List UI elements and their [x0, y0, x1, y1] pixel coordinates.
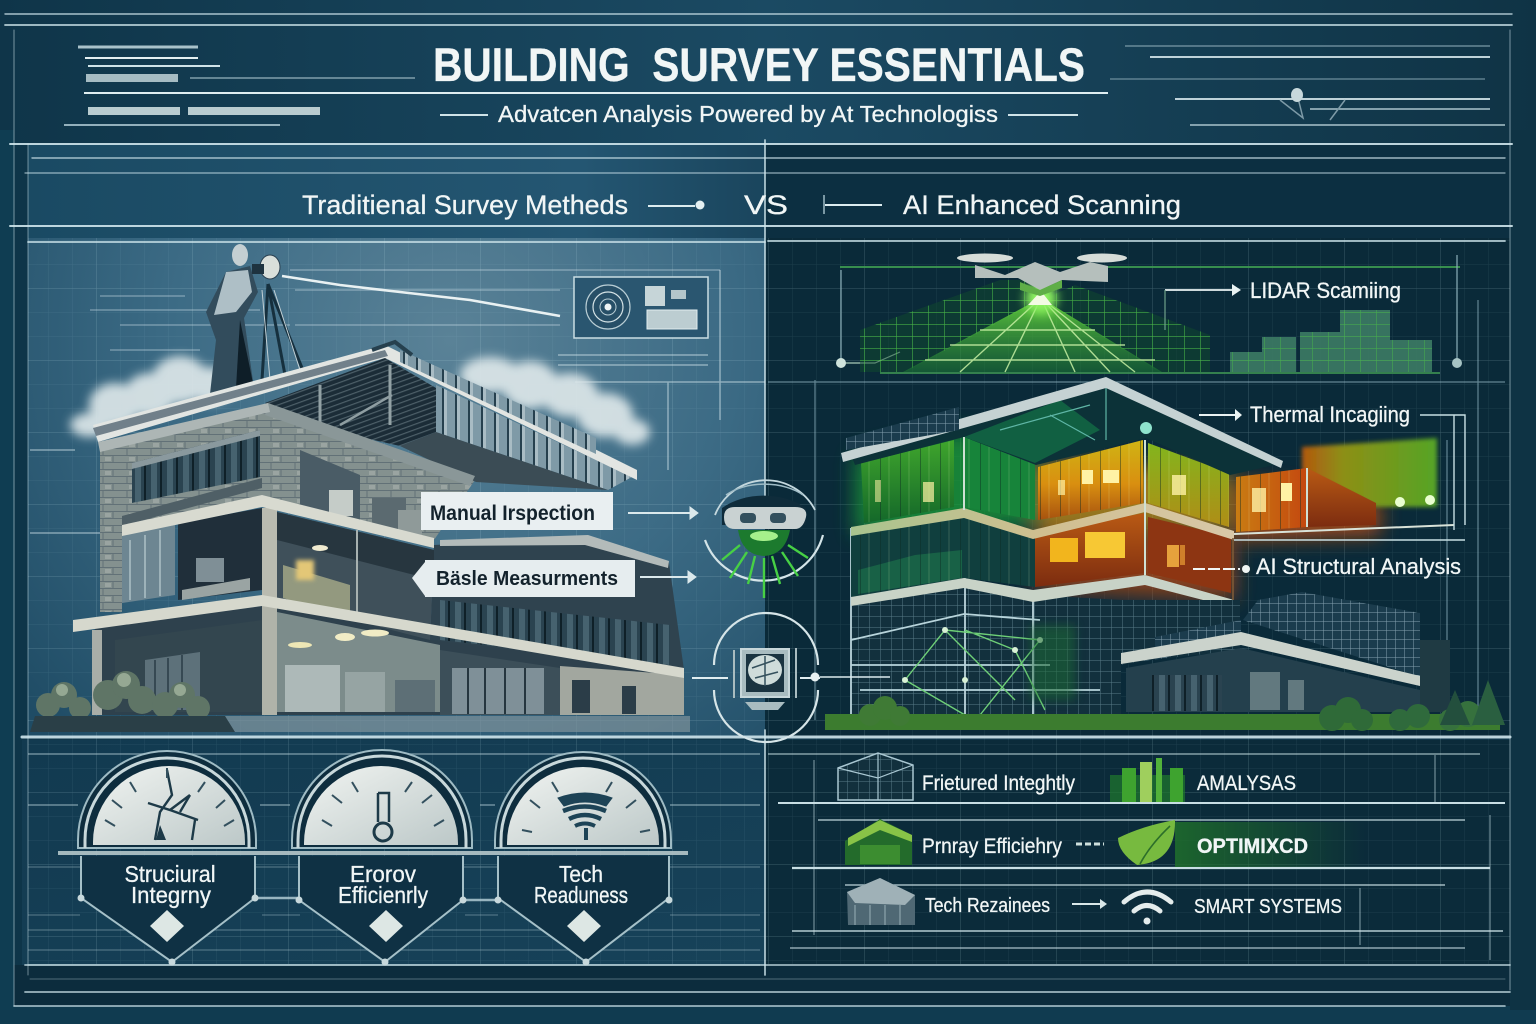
wifi glyph [1124, 892, 1171, 924]
row: structural integrity [838, 753, 1296, 802]
gauge: energy efficiency: Erorov [350, 861, 416, 887]
arrow: measurements to scan icon [640, 571, 696, 583]
thermometer glyph [378, 793, 389, 822]
gauge: tech readiness [494, 752, 672, 966]
roof soffit [265, 358, 632, 490]
row: energy efficiency: Prnray Efficiehry [922, 835, 1062, 858]
gauge: energy efficiency: Efficienrly [338, 882, 428, 908]
center icon: headset scanner [705, 480, 823, 598]
shield [299, 856, 463, 962]
lower wireframe structure [851, 510, 1121, 715]
roof glass [850, 380, 1283, 475]
row: tech readiness [847, 878, 1342, 925]
panel: comparison rows [768, 753, 1505, 960]
blueprint guides [768, 300, 1505, 720]
header decoration: right blueprint lines and survey mark [1110, 46, 1505, 125]
shrubs [30, 671, 235, 732]
gauge band lines [28, 754, 760, 965]
heading: AI enhanced scanning: AI Enhanced Scanning [903, 190, 1181, 220]
ground floor [92, 605, 690, 732]
arrow: manual inspection to scan icon [628, 507, 698, 519]
first slab [122, 495, 434, 548]
surveyor on roof [206, 244, 302, 394]
AI building [841, 377, 1465, 715]
middle floor [100, 447, 684, 670]
roof rail [846, 407, 959, 450]
label: LIDAR scanning: LIDAR Scamiing [1250, 278, 1401, 303]
leaf glyph [1118, 820, 1175, 865]
row lines [768, 754, 1505, 960]
LIDAR city point cloud [1230, 310, 1432, 372]
callout: manual inspection [421, 492, 613, 530]
wifi glyph [558, 793, 612, 840]
main roof [93, 342, 637, 480]
callout: basic measurements [412, 560, 635, 597]
label: LIDAR scanning [1165, 278, 1401, 330]
label: AI structural analysis: AI Structural Analysis [1256, 554, 1461, 579]
sight line from surveyor [282, 276, 560, 316]
title: BUILDING SURVEY ESSENTIALS [433, 38, 1085, 91]
row: structural integrity: AMALYSAS [1197, 772, 1296, 795]
center icon: AI chip [692, 613, 890, 742]
gauge: structural integrity [78, 751, 258, 966]
row: tech readiness: SMART SYSTEMS [1194, 896, 1342, 918]
callout: manual inspection: Manual Irspection [430, 502, 595, 525]
panel: AI enhanced scanning [768, 254, 1505, 731]
drone [957, 254, 1127, 296]
label: thermal imaging: Thermal Incagiing [1250, 402, 1410, 427]
subtitle: Advatcen Analysis Powered by At Technologiss [498, 101, 998, 127]
back heat zone [1302, 438, 1437, 507]
bar glyph [1110, 758, 1185, 802]
roof edge [841, 377, 1283, 468]
vs marker: VS [744, 190, 788, 220]
gauge: structural integrity: Integrny [131, 882, 211, 908]
LIDAR scan frame [836, 255, 1462, 373]
gauge: energy efficiency [292, 750, 472, 966]
blueprint sketch lines [30, 270, 765, 533]
crack glyph [148, 770, 198, 840]
row: structural integrity: Frietured Integhtly [922, 772, 1075, 795]
heat glow [855, 430, 1380, 600]
header decoration: left blueprint bars [64, 47, 1108, 125]
second floor left glass [851, 510, 1035, 597]
upper facade [100, 408, 475, 540]
second floor thermal bays [1035, 513, 1231, 593]
panel: gauge section [28, 750, 760, 966]
right glazed wing [1120, 592, 1450, 712]
shield [498, 856, 669, 962]
row: energy efficiency: OPTIMIXCD [1197, 835, 1308, 858]
gauge: structural integrity: Struciural [124, 861, 216, 887]
LIDAR scan grid [860, 280, 1210, 372]
floor slab upper [851, 503, 1234, 540]
floor slab lower [851, 575, 1234, 608]
clouds [70, 356, 650, 445]
second slab [73, 595, 684, 678]
gauge: tech readiness: Readuness [534, 882, 628, 908]
row: energy efficiency [845, 819, 1365, 867]
callout: basic measurements: Bäsle Measurments [436, 568, 618, 590]
label guide right [1234, 415, 1465, 540]
traditional building [30, 342, 690, 732]
inset survey detail box [574, 277, 708, 338]
panel: traditional survey methods [30, 244, 765, 732]
gauge: tech readiness: Tech [559, 861, 603, 887]
heading: traditional survey methods: Traditienal Survey Metheds [302, 190, 628, 220]
top floor thermal bays [861, 437, 1435, 532]
grass and trees [825, 680, 1505, 731]
row: tech readiness: Tech Rezainees [925, 895, 1050, 917]
shield [81, 856, 255, 962]
